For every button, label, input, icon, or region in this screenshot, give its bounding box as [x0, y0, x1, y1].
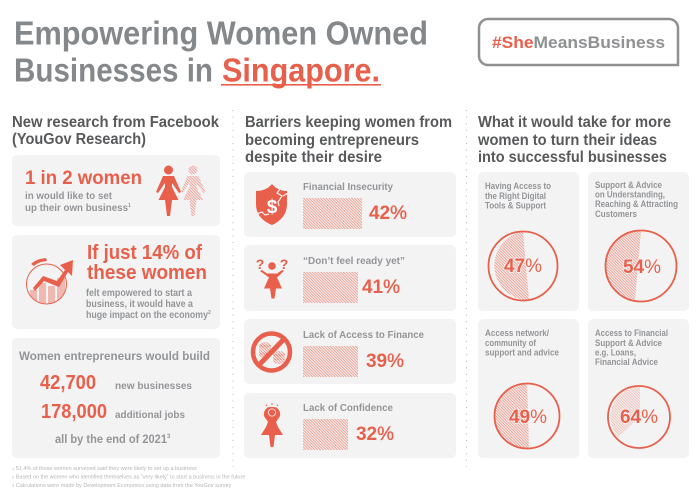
stat: additional jobs: additional jobs	[115, 410, 185, 421]
icon: confused woman: ?	[256, 256, 264, 272]
label: Customers	[595, 209, 637, 219]
pie: 49%: 49%	[509, 407, 547, 428]
stat: additional jobs	[41, 401, 185, 423]
pie: 47%: 47%	[504, 256, 542, 277]
label: Support & Advice	[595, 180, 662, 190]
panel: financial support	[588, 319, 689, 458]
icon: two women	[156, 166, 206, 216]
text: would like to set up	[25, 191, 131, 214]
text: would like to set up: up their own business	[25, 203, 128, 214]
icon: no coins	[253, 334, 290, 370]
bar: 32%	[303, 419, 348, 450]
stat: additional jobs: 178,000	[41, 401, 107, 423]
column heading: barriers: despite their desire	[245, 149, 382, 166]
panel: 14 percent	[12, 235, 220, 329]
title: Singapore.	[222, 52, 380, 88]
label: “Don’t feel ready yet”	[303, 256, 405, 267]
text: by end of 2021: 3	[167, 434, 171, 440]
column heading: barriers	[245, 114, 452, 166]
text: would like to set up: 1	[128, 203, 131, 209]
footnotes	[12, 466, 245, 489]
hashtag badge: #SheMeansBusiness	[492, 33, 665, 52]
panel: entrepreneurs would build	[12, 338, 220, 458]
footnotes: 3 Calculations were made by Development Economics using data from the YouGov survey	[12, 483, 232, 489]
stat: new businesses	[40, 372, 192, 394]
icon: confused woman: ?	[280, 256, 288, 272]
text: would like to set up: in would like to set	[25, 191, 113, 202]
stat: if just 14%: If just 14% of	[87, 241, 202, 264]
column heading: research	[12, 114, 219, 148]
label: Lack of Access to Finance	[303, 330, 425, 341]
stat: new businesses: new businesses	[115, 381, 192, 392]
column heading: barriers: Barriers keeping women from	[245, 114, 452, 131]
stat: new businesses: 42,700	[40, 372, 96, 394]
title: Empowering Women Owned	[14, 14, 428, 52]
text: by end of 2021: all by the end of 2021	[55, 432, 167, 446]
label	[485, 328, 559, 358]
column heading: research: New research from Facebook	[12, 114, 219, 131]
footnotes: 2 Based on the women who identified themselves as “very likely” to start a business in the future	[12, 474, 245, 480]
panel: digital tools	[478, 172, 579, 311]
icon: cracked shield	[256, 184, 288, 225]
column heading: what it would take: What it would take for more	[478, 114, 671, 131]
label: Access network/	[485, 328, 549, 338]
column heading: barriers: becoming entrepreneurs	[245, 132, 419, 149]
label	[485, 181, 551, 210]
panel: lack of access to finance	[244, 319, 456, 384]
stat: if just 14%: these women	[87, 261, 207, 284]
column heading: research: (YouGov Research)	[12, 131, 146, 148]
heading: women entrepreneurs: Women entrepreneurs would build	[19, 349, 210, 363]
hashtag badge	[479, 19, 678, 65]
text: felt empowered: 2	[208, 310, 211, 316]
value: 32%: 32%	[356, 424, 394, 445]
column heading: what it would take: into successful businesses	[478, 149, 667, 166]
panel: financial insecurity	[244, 172, 456, 237]
label: Having Access to	[485, 181, 551, 191]
icon: growth chart	[26, 258, 73, 310]
value: 39%: 39%	[366, 351, 404, 372]
panel: 1 in 2 women	[12, 155, 220, 226]
label: on Understanding,	[595, 190, 665, 200]
stat: 1 in 2 women: 1 in 2 women	[25, 168, 142, 189]
icon: stressed woman	[261, 403, 283, 447]
label: Financial Advice	[595, 357, 658, 367]
label: support and advice	[485, 348, 559, 358]
footnotes: 1 51.4% of those women surveyed said they were likely to set up a business	[12, 466, 197, 472]
title	[14, 14, 428, 88]
text: felt empowered: business, it would have a	[86, 299, 193, 310]
bar: 42%	[303, 198, 362, 229]
label: community of	[485, 338, 537, 348]
label: the Right Digital	[485, 191, 546, 201]
label: e.g. Loans,	[595, 348, 636, 358]
bar: 39%	[303, 346, 358, 377]
label	[595, 180, 678, 219]
text: felt empowered: huge impact on the economy	[86, 310, 208, 321]
stat: if just 14%	[87, 241, 207, 284]
pie: 54%: 54%	[623, 257, 661, 278]
pie: 64%: 64%	[620, 407, 658, 428]
bar: 41%	[303, 272, 358, 303]
label: Access to Financial	[595, 328, 668, 338]
label	[595, 328, 668, 367]
column heading: what it would take: women to turn their ideas	[477, 132, 657, 149]
icon: confused woman	[256, 256, 288, 298]
label: Support & Advice	[595, 338, 662, 348]
label: Tools & Support	[485, 200, 546, 210]
value: 42%: 42%	[369, 203, 407, 224]
label: Financial Insecurity	[303, 182, 394, 193]
text: felt empowered: felt empowered to start a	[86, 288, 192, 299]
panel: not ready	[244, 245, 456, 311]
title: Businesses in	[14, 52, 213, 88]
icon: cracked shield: $	[267, 197, 278, 218]
panel: lack of confidence	[244, 393, 456, 458]
text: felt empowered	[86, 288, 211, 321]
panel: customers	[588, 172, 689, 311]
value: 41%: 41%	[362, 277, 400, 298]
label: Reaching & Attracting	[595, 199, 678, 209]
label: Lack of Confidence	[303, 403, 394, 414]
column heading: what it would take	[477, 114, 671, 166]
panel: network	[478, 319, 579, 458]
